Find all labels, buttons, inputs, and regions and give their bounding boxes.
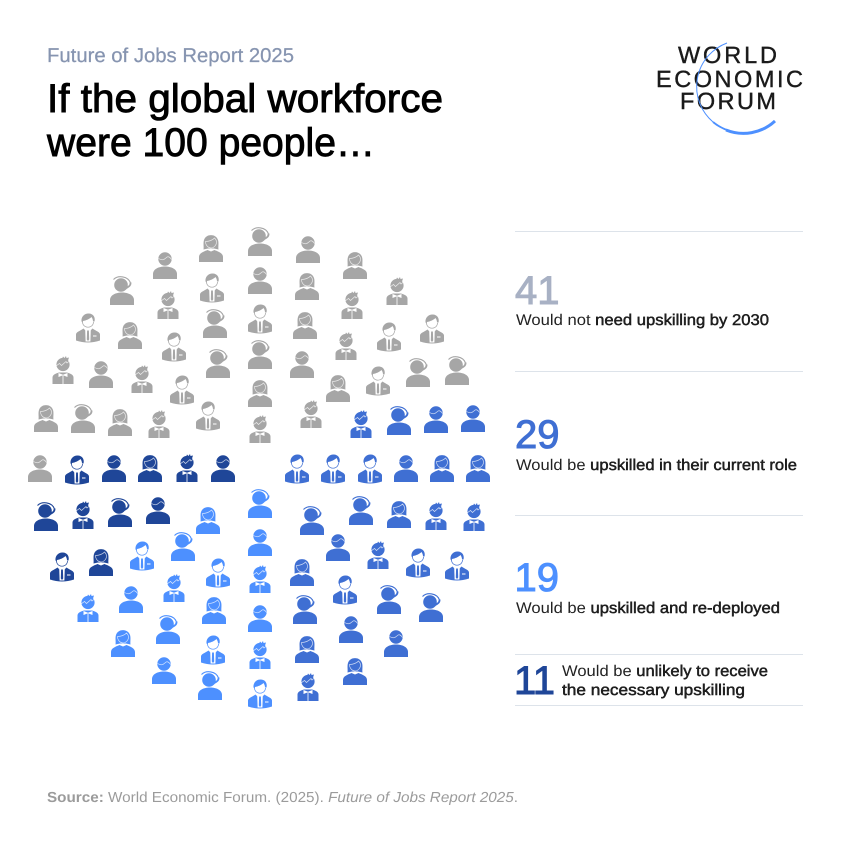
- icon: person: [300, 507, 324, 535]
- icon: person: [386, 277, 408, 305]
- icon: person: [420, 314, 444, 344]
- people chart: 100 icons: [28, 228, 490, 708]
- icon: person: [162, 332, 186, 362]
- icon: person: [171, 533, 195, 561]
- icon: person: [300, 400, 322, 428]
- icon: person: [339, 616, 363, 643]
- icon: person: [138, 455, 162, 482]
- icon: person: [152, 657, 176, 684]
- icon: person: [196, 402, 220, 430]
- legend item: 11: the necessary upskilling: [562, 682, 745, 699]
- icon: person: [394, 455, 418, 482]
- icon: person: [130, 542, 154, 570]
- legend item: 29: Would be upskilled in their current role: [516, 457, 797, 474]
- icon: person: [293, 312, 317, 339]
- icon: person: [285, 454, 309, 484]
- icon: person: [50, 552, 74, 582]
- icon: person: [28, 455, 52, 482]
- icon: person: [290, 351, 314, 378]
- icon: person: [426, 502, 446, 530]
- icon: person: [108, 409, 132, 436]
- legend item: 11: [514, 659, 768, 703]
- logo: World Economic Forum: ECONOMIC: [656, 66, 803, 92]
- icon: person: [366, 366, 390, 396]
- icon: person: [248, 304, 272, 334]
- icon: person: [206, 350, 230, 378]
- icon: person: [71, 405, 95, 433]
- icon: person: [108, 499, 132, 527]
- icon: person: [321, 454, 345, 484]
- icon: person: [406, 548, 430, 578]
- icon: person: [461, 405, 485, 432]
- icon: person: [387, 501, 411, 528]
- icon: person: [464, 503, 484, 531]
- logo: World Economic Forum: FORUM: [680, 88, 776, 114]
- icon: person: [350, 410, 372, 438]
- icon: person: [132, 365, 152, 393]
- icon: person: [430, 455, 454, 482]
- icon: person: [76, 314, 100, 342]
- icon: person: [72, 501, 94, 529]
- dark blue group: 11 unlikely to receive upskilling: [34, 454, 235, 582]
- icon: person: [110, 277, 134, 305]
- icon: person: [342, 291, 362, 319]
- icon: person: [89, 549, 113, 576]
- icon: person: [89, 361, 113, 388]
- mid blue group: 29 upskilled in current role: [285, 405, 490, 701]
- icon: person: [290, 559, 314, 586]
- icon: person: [358, 454, 382, 484]
- icon: person: [298, 673, 318, 701]
- icon: person: [248, 267, 272, 294]
- title: If the global workforce: [47, 77, 443, 121]
- icon: person: [250, 415, 270, 443]
- icon: person: [343, 252, 367, 279]
- icon: person: [146, 497, 170, 524]
- icon: person: [466, 455, 490, 482]
- icon: person: [200, 274, 224, 302]
- icon: person: [119, 586, 143, 613]
- logo: World Economic Forum: [656, 42, 803, 133]
- icon: person: [34, 503, 58, 531]
- icon: person: [326, 375, 350, 402]
- gray group: 41 would not need upskilling: [28, 228, 469, 482]
- icon: person: [156, 616, 180, 644]
- icon: person: [384, 630, 408, 657]
- icon: person: [293, 596, 317, 624]
- icon: person: [406, 359, 430, 387]
- icon: person: [445, 357, 469, 385]
- title: [46, 77, 443, 165]
- icon: person: [336, 332, 356, 360]
- icon: person: [326, 534, 350, 561]
- legend item: 41: Would not need upskilling by 2030: [516, 312, 769, 329]
- icon: person: [248, 228, 272, 256]
- icon: person: [78, 594, 98, 622]
- icon: person: [248, 341, 272, 369]
- icon: person: [419, 594, 443, 622]
- icon: person: [170, 376, 194, 404]
- icon: person: [176, 454, 198, 482]
- legend item: 19: Would be upskilled and re-deployed: [516, 600, 780, 617]
- icon: person: [377, 586, 401, 614]
- icon: person: [164, 574, 184, 602]
- subtitle: Future of Jobs Report 2025: [47, 45, 294, 67]
- icon: person: [153, 252, 177, 279]
- source note: Source: World Economic Forum. (2025). Future of Jobs Report 2025 .: [47, 790, 518, 806]
- icon: person: [248, 680, 272, 708]
- icon: person: [296, 236, 320, 263]
- legend item: 19: [514, 556, 780, 617]
- icon: person: [196, 507, 220, 534]
- icon: person: [199, 235, 223, 262]
- icon: person: [111, 630, 135, 657]
- legend item: 41: 41: [515, 269, 560, 313]
- icon: person: [333, 576, 357, 604]
- icon: person: [368, 541, 388, 569]
- icon: person: [248, 605, 272, 632]
- legend item: 29: 29: [515, 413, 560, 457]
- icon: person: [295, 273, 319, 300]
- legend item: 11: 11: [514, 659, 555, 703]
- title: were 100 people…: [46, 121, 375, 165]
- icon: person: [202, 597, 226, 624]
- icon: person: [102, 455, 126, 482]
- icon: person: [248, 529, 272, 556]
- icon: person: [445, 552, 469, 580]
- icon: person: [148, 410, 170, 438]
- legend item: 19: 19: [514, 556, 559, 600]
- legend item: 41: [515, 269, 769, 329]
- logo: World Economic Forum: WORLD: [678, 42, 777, 68]
- icon: person: [424, 406, 448, 433]
- icon: person: [250, 641, 270, 669]
- icon: person: [65, 456, 89, 484]
- icon: person: [198, 672, 222, 700]
- icon: person: [34, 405, 58, 432]
- icon: person: [295, 636, 319, 663]
- icon: person: [248, 380, 272, 407]
- icon: person: [52, 356, 74, 384]
- icon: person: [343, 658, 367, 685]
- icon: person: [158, 291, 178, 319]
- icon: person: [206, 558, 230, 588]
- light blue group: 19 upskilled and re-deployed: [78, 490, 272, 708]
- icon: person: [118, 322, 142, 349]
- icon: person: [203, 310, 227, 338]
- icon: person: [250, 565, 270, 593]
- icon: person: [211, 455, 235, 482]
- icon: person: [349, 497, 373, 525]
- legend item: 11: Would be unlikely to receive: [562, 663, 768, 680]
- icon: person: [248, 490, 272, 518]
- icon: person: [377, 322, 401, 352]
- icon: person: [387, 407, 411, 435]
- icon: person: [201, 636, 225, 664]
- legend item: 29: [515, 413, 797, 474]
